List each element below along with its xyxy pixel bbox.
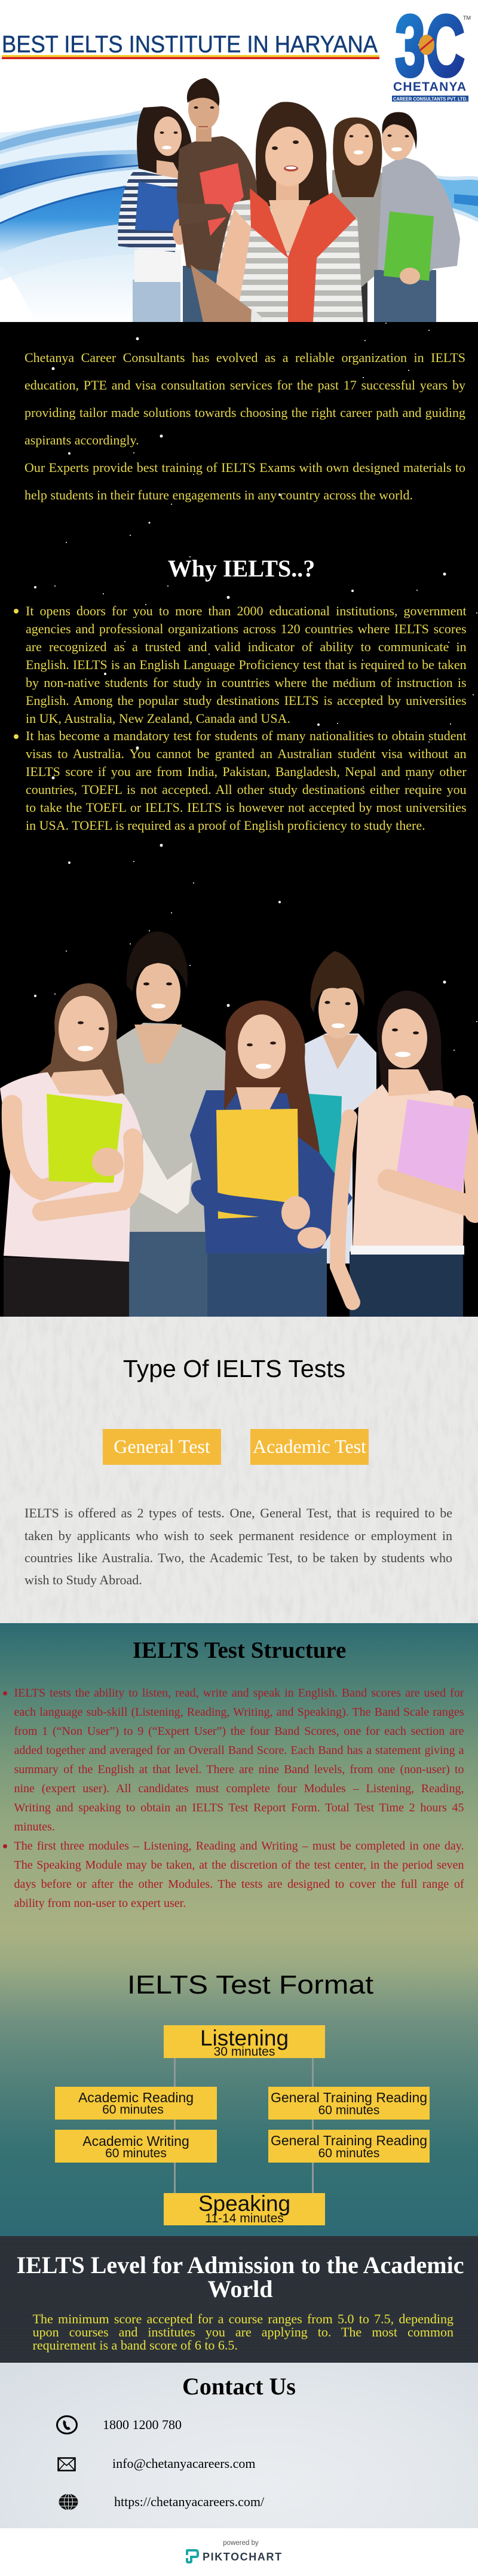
person: man with green notebook — [374, 112, 460, 323]
why IELTS bullet list: It has become a mandatory test for students of many nationalities to obtain student — [26, 728, 467, 743]
box: general training reading second — [268, 2130, 430, 2163]
stars — [34, 323, 477, 1103]
test structure bullet list: ability from non-user to expert user. — [14, 1897, 186, 1910]
icon: mail — [57, 2457, 76, 2471]
box: general training reading: General Training Reading — [271, 2090, 427, 2105]
intro text block: help students in their future engagements in any country across the world. — [24, 487, 413, 502]
box: speaking: 11-14 minutes — [205, 2212, 284, 2225]
logo: 3C Chetanya Career Consultants: TM — [463, 15, 471, 21]
heading: why IELTS: Why IELTS..? — [168, 555, 315, 582]
box: general training reading second: 60 minutes — [318, 2146, 379, 2160]
heading: type of IELTS tests: Type Of IELTS Tests — [123, 1355, 345, 1382]
test structure bullet list: days before or after the other Modules. The tests are designed to cover the full range of — [14, 1878, 464, 1891]
email address: info@chetanyacareers.com — [112, 2456, 256, 2471]
test structure bullet list: minutes. — [14, 1820, 55, 1833]
box: listening: Listening — [200, 2026, 289, 2050]
panel: contact us — [0, 2363, 478, 2528]
box: academic writing: 60 minutes — [105, 2146, 167, 2160]
button: academic test — [250, 1429, 369, 1465]
person: central woman with red scarf — [191, 102, 363, 322]
test structure bullet list: added together and averaged for an Overall Band Score. Each Band has a statement giving a — [14, 1744, 464, 1757]
icon: globe — [59, 2494, 78, 2510]
why IELTS bullet list: in USA. TOEFL is required as a proof of English proficiency to study there. — [26, 818, 425, 833]
button: academic test: Academic Test — [253, 1436, 366, 1457]
website address: https://chetanyacareers.com/ — [114, 2494, 264, 2509]
test structure bullet list: nine (expert user). All candidates must complete four Modules – Listening, Reading, — [14, 1782, 464, 1795]
box: general training reading — [268, 2087, 430, 2120]
Piktochart wordmark: PIKTOCHART — [203, 2551, 283, 2563]
box: academic reading: Academic Reading — [78, 2090, 194, 2105]
test structure bullet list: each language sub-skill (Listening, Reading, Writing, and Speaking). The Band Scale ranges — [14, 1706, 464, 1719]
heading: IELTS level for admission — [17, 2252, 464, 2302]
heading: contact us: Contact Us — [182, 2373, 296, 2400]
box: listening — [164, 2025, 325, 2058]
test structure bullet list: summary of the English at that level. There are nine Band levels, from one (non-user) to — [14, 1763, 464, 1776]
box: academic reading: 60 minutes — [102, 2103, 164, 2117]
person: woman in grey cardigan — [332, 118, 390, 323]
why IELTS bullet list: in UK, Australia, New Zealand, Canada and USA. — [26, 711, 290, 725]
why IELTS bullet list: to take the TOEFL or IELTS. IELTS is however not accepted by most universities — [26, 800, 467, 815]
why IELTS bullet list — [14, 603, 467, 833]
box: general training reading second: General Training Reading — [271, 2133, 427, 2148]
heading: IELTS test structure: IELTS Test Structure — [133, 1637, 346, 1663]
why IELTS bullet list: It opens doors for you to more than 2000 educational institutions, government — [26, 603, 467, 618]
box: academic writing: Academic Writing — [82, 2133, 189, 2149]
flow connector: left — [174, 2058, 176, 2193]
hero students photo and branding — [2, 0, 471, 322]
person: man in striped shirt with teal notebook — [299, 951, 376, 1264]
footer: powered by Piktochart — [0, 2528, 478, 2576]
logo: 3C Chetanya Career Consultants: CAREER CONSULTANTS PVT. LTD. — [393, 96, 467, 102]
test types description: IELTS is offered as 2 types of tests. One, General Test, that is required to be — [24, 1505, 452, 1520]
box: academic reading — [55, 2087, 217, 2120]
admission score text: requirement is a band score of 6 to 6.5. — [33, 2338, 238, 2353]
panel: type of IELTS tests — [0, 1317, 478, 1623]
intro text block: education, PTE and visa consultation services for the past 17 successful years by — [24, 378, 465, 392]
box: listening: 30 minutes — [214, 2045, 275, 2059]
test structure bullet list: Writing and speaking to obtain an IELTS Test Report Form. Total Test Time 2 hours 45 — [14, 1801, 464, 1814]
icon: phone — [56, 2415, 78, 2434]
intro text block: Chetanya Career Consultants has evolved as a reliable organization in IELTS — [24, 350, 465, 364]
box: academic writing — [55, 2130, 217, 2163]
why IELTS bullet list: English. IELTS is an English Language Proficiency test that is required to be taken — [26, 657, 467, 672]
box: general training reading: 60 minutes — [318, 2103, 379, 2117]
test types description: taken by applicants who wish to seek permanent residence or employment in — [24, 1528, 452, 1543]
panel: IELTS level for admission — [0, 2236, 478, 2363]
admission score text — [32, 2311, 454, 2353]
heading: IELTS level for admission: World — [208, 2276, 272, 2302]
logo: 3C Chetanya Career Consultants: CHETANYA — [393, 80, 466, 94]
test types description: wish to Study Abroad. — [24, 1572, 142, 1587]
box: speaking — [164, 2193, 325, 2225]
person: tall man in grey henley — [114, 931, 227, 1317]
why IELTS bullet list: by non-native students for study in countries where the medium of instruction is — [26, 675, 467, 690]
test structure bullet list — [3, 1686, 464, 1910]
admission score text: The minimum score accepted for a course ranges from 5.0 to 7.5, depending — [33, 2311, 454, 2326]
heading: IELTS test format: IELTS Test Format — [127, 1970, 373, 1999]
intro text block: aspirants accordingly. — [24, 433, 139, 447]
starry black panel with second students photo — [0, 322, 478, 1317]
intro text block — [24, 350, 465, 502]
intro text block: Our Experts provide best training of IELTS Exams with own designed materials to — [24, 460, 465, 474]
phone number: 1800 1200 780 — [103, 2417, 182, 2432]
powered by label: powered by — [223, 2540, 259, 2547]
why IELTS bullet list: IELTS score if you are from India, Pakistan, Bangladesh, Nepal and many other — [26, 764, 467, 779]
test types description: countries like Australia. Two, the Academic Test, to be taken by students who — [24, 1550, 452, 1565]
paper texture — [23, 1321, 477, 1623]
button: general test: General Test — [114, 1436, 210, 1457]
person: woman with lime notebook — [0, 983, 142, 1317]
why IELTS bullet list: countries, TOEFL is not accepted. All other study destinations either require you — [26, 782, 467, 797]
test structure bullet list: from 1 (“Non User”) to 9 (“Expert User”) the four Band Scores, one for each section are — [14, 1725, 464, 1738]
intro text block: providing tailor made solutions towards choosing the right career path and guiding — [24, 405, 465, 419]
flow connector: right — [312, 2058, 314, 2193]
test structure bullet list: The first three modules – Listening, Reading and Writing – must be completed in one day. — [14, 1839, 464, 1853]
icon: Piktochart mark — [186, 2549, 199, 2563]
why IELTS bullet list: visas to Australia. You cannot be granted an Australian student visa without an — [26, 746, 467, 761]
hero background swooshes — [0, 106, 478, 305]
test structure bullet list: The Speaking Module may be taken, at the discretion of the test center, in the period seven — [14, 1859, 464, 1872]
person: woman with pink notebook — [338, 990, 476, 1317]
person: man with red notebook — [177, 78, 258, 323]
button: general test — [103, 1429, 221, 1465]
why IELTS bullet list: agencies and professional organizations across 120 countries where IELTS scores — [26, 621, 467, 636]
person: woman in blue sweater with yellow notebook — [190, 1001, 353, 1317]
heading: IELTS level for admission: IELTS Level for Admission to the Academic — [17, 2252, 464, 2278]
panel: IELTS test structure and format — [0, 1623, 478, 2236]
box: speaking: Speaking — [198, 2191, 290, 2216]
admission score text: upon courses and institutes you are applying to. The most common — [33, 2324, 454, 2339]
test structure bullet list: IELTS tests the ability to listen, read, write and speak in English. Band scores are used for — [14, 1686, 464, 1700]
title: best IELTS institute in Haryana: BEST IELTS INSTITUTE IN HARYANA — [2, 31, 378, 57]
person: woman with blue binder — [118, 106, 192, 323]
why IELTS bullet list: are recognized as a trusted and valid indicator of ability to communicate in — [26, 639, 467, 654]
test types description — [24, 1505, 452, 1587]
why IELTS bullet list: English. Among the popular study destinations IELTS is accepted by universities — [26, 693, 467, 708]
